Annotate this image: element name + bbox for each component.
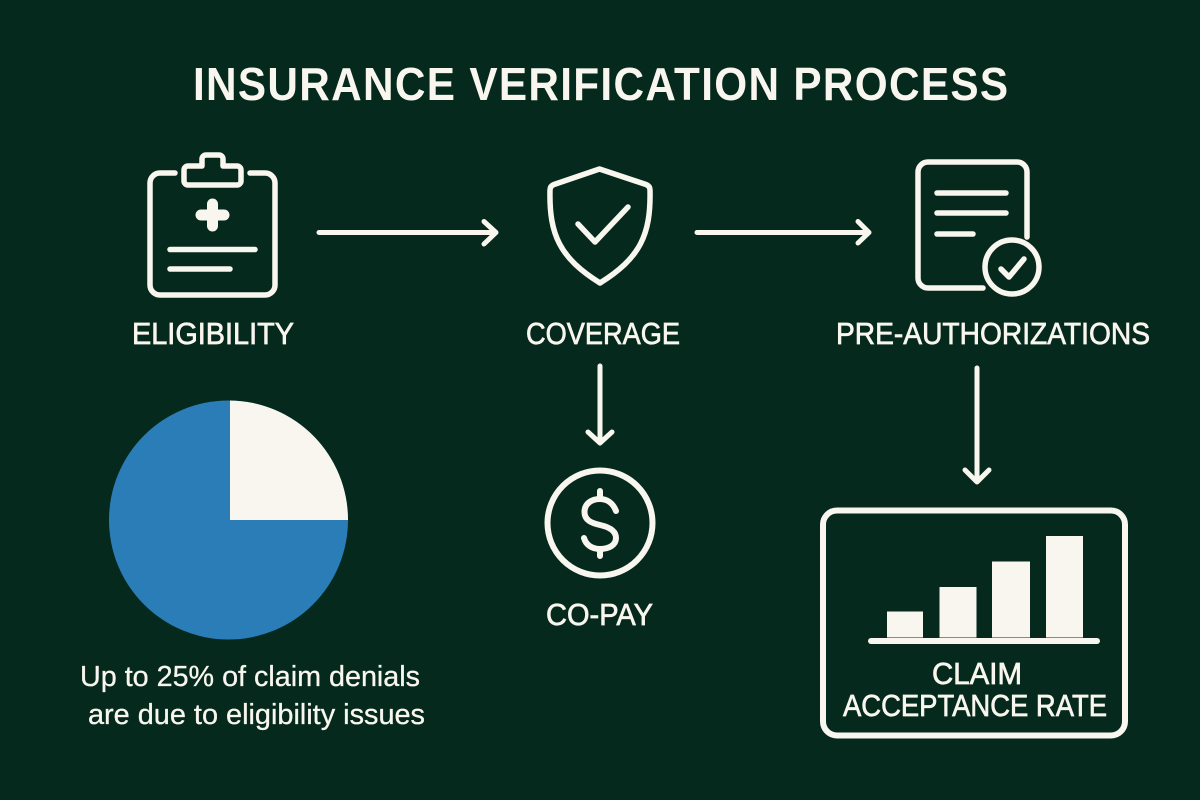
icon: co-pay dollar	[548, 470, 652, 576]
label: pre-authorizations: PRE-AUTHORIZATIONS	[836, 317, 1150, 351]
caption: claim denials statistic: Up to 25% of claim denials	[80, 661, 420, 693]
label: eligibility: ELIGIBILITY	[132, 317, 294, 351]
label: co-pay: CO-PAY	[546, 598, 653, 632]
title: INSURANCE VERIFICATION PROCESS	[193, 59, 1008, 110]
panel: claim acceptance rate	[823, 510, 1125, 736]
label: claim acceptance rate: ACCEPTANCE RATE	[843, 689, 1107, 723]
caption: claim denials statistic: are due to eligibility issues	[88, 699, 425, 731]
label: claim acceptance rate	[843, 657, 1107, 723]
label: coverage: COVERAGE	[526, 317, 680, 351]
icon: pre-authorization document	[918, 162, 1039, 294]
arrow: pre-authorizations to claim acceptance	[965, 368, 989, 482]
arrow: coverage to co-pay	[588, 366, 612, 443]
pie chart: 25 percent of claim denials	[109, 400, 348, 640]
icon: eligibility clipboard	[150, 155, 275, 295]
caption: claim denials statistic	[80, 661, 425, 731]
arrow: coverage to pre-authorizations	[697, 222, 869, 243]
icon: coverage shield	[550, 169, 650, 283]
arrow: eligibility to coverage	[319, 222, 496, 244]
bar chart	[868, 536, 1100, 644]
label: claim acceptance rate: CLAIM	[932, 657, 1022, 691]
